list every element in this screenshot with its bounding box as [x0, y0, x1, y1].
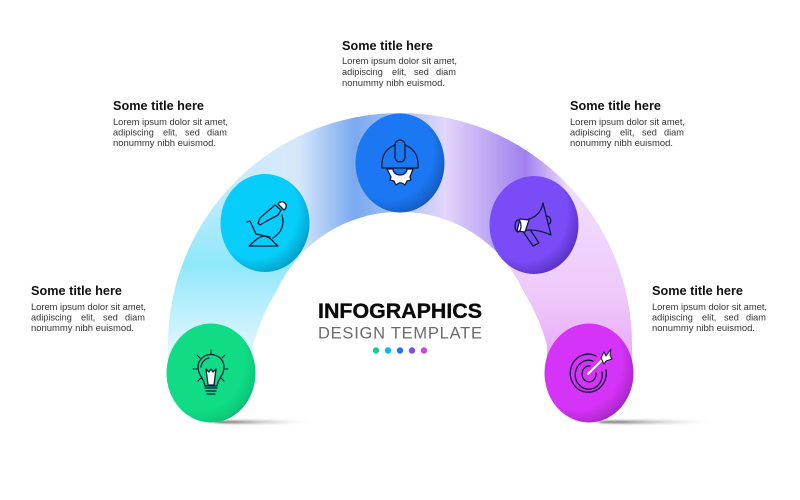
- text block: step 2: adipiscing: [113, 128, 154, 138]
- text block: step 5: Some title here: [652, 283, 743, 298]
- arch band: [168, 113, 632, 375]
- text block: step 4: [570, 98, 685, 148]
- infographic canvas: [31, 40, 766, 425]
- step 1: green sphere with bulb icon: [166, 324, 256, 422]
- text block: step 3: elit,: [392, 67, 406, 77]
- text block: step 4: diam: [664, 128, 684, 138]
- text block: step 2: Lorem ipsum dolor sit amet,: [113, 117, 228, 127]
- text block: step 1: sed: [103, 312, 118, 322]
- text block: step 5: nonummy nibh euismod.: [652, 323, 755, 333]
- text block: step 2: [113, 98, 228, 148]
- text block: step 2: diam: [207, 128, 227, 138]
- text block: step 3: adipiscing: [342, 67, 383, 77]
- ground shadow right: [597, 420, 713, 424]
- five colored dots: [373, 347, 427, 354]
- text block: step 1: [31, 283, 146, 333]
- text block: step 2: Some title here: [113, 98, 204, 113]
- text block: step 2: nonummy nibh euismod.: [113, 138, 216, 148]
- text block: step 2: elit,: [163, 128, 177, 138]
- text block: step 5: Lorem ipsum dolor sit amet,: [652, 302, 767, 312]
- text block: step 4: nonummy nibh euismod.: [570, 138, 673, 148]
- text block: step 1: adipiscing: [31, 312, 72, 322]
- text block: step 5: diam: [746, 312, 766, 322]
- text block: step 3: Lorem ipsum dolor sit amet,: [342, 56, 457, 66]
- arch band: left leg: [168, 188, 299, 360]
- text block: step 4: adipiscing: [570, 128, 611, 138]
- text block: step 4: sed: [642, 128, 657, 138]
- text block: step 3: nonummy nibh euismod.: [342, 78, 445, 88]
- text block: step 1: Some title here: [31, 283, 122, 298]
- text block: step 5: adipiscing: [652, 312, 693, 322]
- step 3: blue sphere with hard hat icon: [356, 114, 444, 212]
- ground shadow left: [213, 420, 311, 424]
- text block: step 5: [652, 283, 767, 333]
- icon: target and dart: [570, 349, 612, 392]
- center subtitle: DESIGN TEMPLATE: [318, 324, 482, 342]
- text block: step 4: Some title here: [570, 98, 661, 113]
- icon: helmet and gear: [382, 140, 418, 185]
- text block: step 1: elit,: [81, 312, 95, 322]
- text block: step 3: Some title here: [342, 38, 433, 53]
- step 2: cyan sphere with microscope icon: [220, 174, 310, 272]
- step 4: purple sphere with megaphone icon: [490, 176, 578, 274]
- center title: [318, 299, 482, 342]
- icon: megaphone: [515, 203, 551, 246]
- text block: step 4: Lorem ipsum dolor sit amet,: [570, 117, 685, 127]
- step 5: magenta sphere with target icon: [544, 324, 634, 422]
- text block: step 1: Lorem ipsum dolor sit amet,: [31, 302, 146, 312]
- center title: INFOGRAPHICS: [318, 299, 482, 323]
- text block: step 3: diam: [436, 67, 456, 77]
- text block: step 4: elit,: [620, 128, 634, 138]
- text block: step 1: nonummy nibh euismod.: [31, 323, 134, 333]
- text block: step 3: sed: [414, 67, 429, 77]
- icon: microscope: [247, 202, 286, 246]
- text block: step 5: elit,: [702, 312, 716, 322]
- text block: step 5: sed: [724, 312, 739, 322]
- text block: step 3: [342, 38, 457, 88]
- text block: step 1: diam: [125, 312, 145, 322]
- icon: light bulb: [193, 350, 228, 394]
- text block: step 2: sed: [185, 128, 200, 138]
- arch band: right leg: [508, 194, 632, 360]
